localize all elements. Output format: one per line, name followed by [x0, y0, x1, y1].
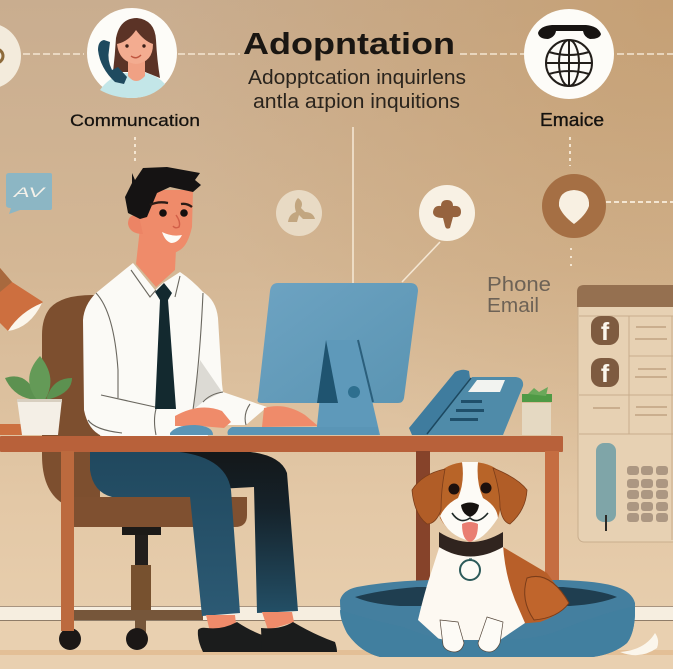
shoes: [198, 622, 337, 652]
neck: [136, 228, 177, 287]
social icon 1: f: [601, 318, 610, 346]
head: [125, 167, 201, 255]
desk lamp: [0, 268, 43, 435]
keyboard: [228, 427, 378, 435]
icon: location circle: [542, 174, 606, 238]
head white: [440, 462, 498, 541]
desk: [0, 436, 563, 631]
label: communication: Communcation: [70, 111, 200, 130]
socks: [206, 612, 294, 632]
body white: [418, 545, 525, 640]
trousers front leg: [90, 451, 240, 616]
icon: partial circle left: [0, 23, 21, 89]
dog bed: [340, 580, 635, 657]
icon: chat bubble: AV: [12, 184, 47, 200]
icon: faint circle: [276, 190, 322, 236]
left hand: [175, 407, 231, 428]
panel text lines: [593, 327, 667, 415]
office chair: [42, 295, 247, 650]
social icon 1: [591, 316, 619, 346]
dog bed front rim: [340, 606, 635, 657]
text: email: Email: [487, 295, 539, 317]
head: [437, 462, 502, 540]
haunch: [525, 576, 569, 620]
desk telephone: [409, 370, 523, 435]
chair wheels: [59, 628, 148, 650]
icon: chat bubble: [6, 173, 52, 214]
label: emaice: Emaice: [540, 110, 604, 130]
keypad: [627, 466, 668, 522]
icon: woman on the phone: [87, 8, 177, 98]
collar: [439, 532, 503, 556]
social icon 2: [591, 358, 619, 388]
floor: [0, 621, 673, 669]
dog front paws: [440, 617, 503, 652]
tie: [155, 283, 176, 409]
monitor stand: [316, 340, 380, 435]
icon: plus circle: [419, 185, 475, 241]
dog tail: [620, 633, 658, 655]
tongue: [462, 522, 478, 542]
right hand: [262, 406, 318, 427]
ears: [412, 469, 445, 524]
dog: [412, 462, 569, 640]
subtitle line 1: Adopptcation inquirlens: [248, 67, 466, 89]
icon: telephone and globe: [524, 9, 614, 99]
handset: [596, 443, 616, 531]
text: phone: Phone: [487, 274, 551, 296]
shirt body: [83, 263, 267, 436]
body brown: [503, 547, 569, 625]
person: [83, 167, 337, 652]
mouse: [170, 425, 213, 435]
connector lines: [23, 54, 673, 283]
potted plant right: [522, 387, 552, 435]
baseboard: [0, 606, 673, 621]
bed inner: [355, 587, 617, 606]
subtitle line 2: antla aɪpion inquitions: [253, 91, 460, 113]
collar tag: [460, 560, 480, 580]
sleeve and collar lines: [88, 270, 250, 435]
social icon 2: f: [601, 360, 610, 388]
contact panel: [577, 285, 673, 542]
panel grid: [579, 316, 673, 540]
potted plant left: [5, 356, 72, 435]
computer monitor: [258, 283, 418, 403]
trousers back leg: [160, 451, 298, 613]
eyes and nose: [448, 484, 460, 494]
title: Adopntation: [243, 26, 455, 61]
shirt shadow: [193, 360, 222, 410]
